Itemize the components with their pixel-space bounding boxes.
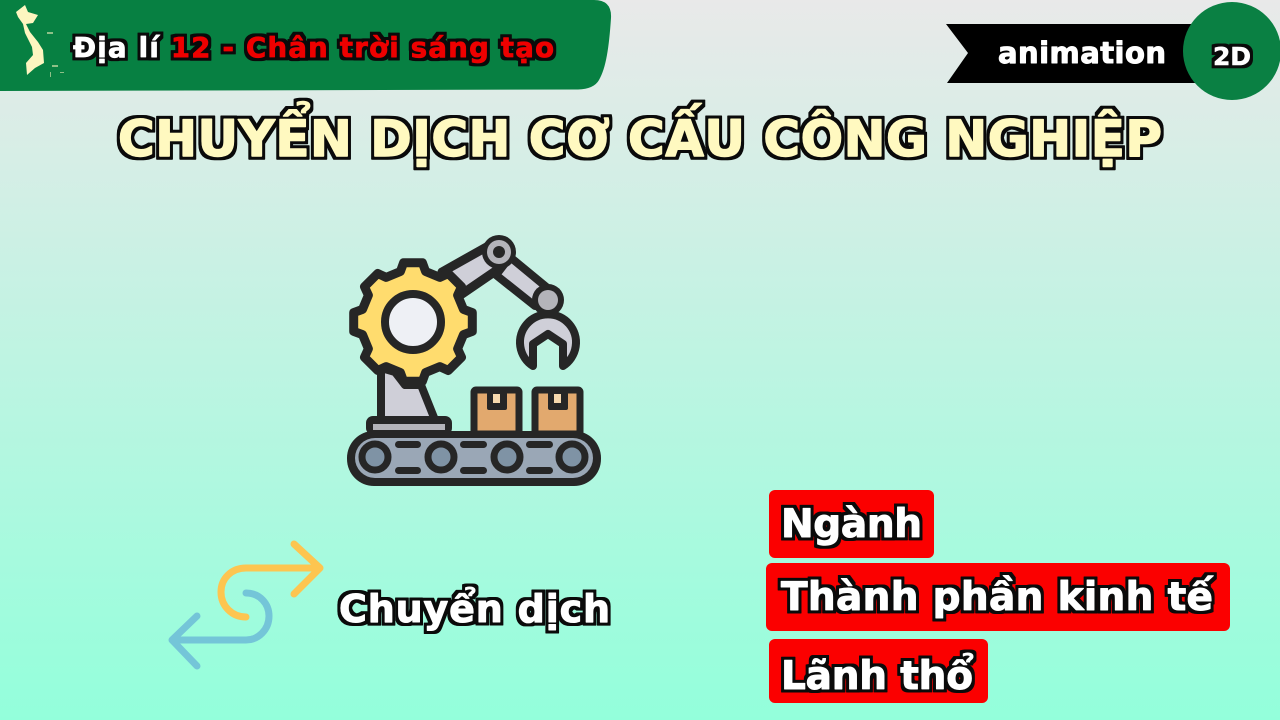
gear <box>354 263 472 381</box>
label: Chuyển dịch: Chuyển dịch <box>339 587 610 631</box>
claw <box>520 314 576 366</box>
pedestal <box>381 368 435 420</box>
badge: Ngành <box>769 490 934 558</box>
green circle <box>1183 2 1280 100</box>
wrist joint <box>532 284 564 316</box>
badge: Thành phần kinh tế: Thành phần kinh tế <box>781 575 1214 620</box>
circle label: 2D <box>1213 42 1251 71</box>
ribbon <box>946 24 1205 83</box>
header banner <box>0 0 611 91</box>
banner shape <box>0 0 611 91</box>
icon: transition arrows <box>172 544 320 666</box>
blue arrow <box>172 593 269 666</box>
badges list <box>766 490 1230 703</box>
badge: Lãnh thổ <box>769 639 988 703</box>
ribbon label: animation <box>998 36 1166 70</box>
elbow joint <box>482 235 516 269</box>
badge: Lãnh thổ: Lãnh thổ <box>781 653 973 699</box>
robot forearm <box>496 257 550 306</box>
title: CHUYỂN DỊCH CƠ CẤU CÔNG NGHIỆP <box>118 101 1162 168</box>
animation 2D badge <box>946 2 1280 100</box>
box left <box>474 390 519 434</box>
conveyor belt <box>347 431 601 486</box>
pedestal plate <box>366 416 452 435</box>
badge: Thành phần kinh tế <box>766 563 1230 631</box>
banner title: Địa lí 12 - Chân trời sáng tạo <box>73 32 554 64</box>
yellow arrow <box>221 544 320 617</box>
badge: Ngành: Ngành <box>781 502 922 547</box>
box right <box>535 390 580 434</box>
icon: Vietnam map <box>16 5 64 77</box>
icon: factory robot arm and conveyor <box>347 235 601 486</box>
robot upper arm <box>442 245 500 294</box>
